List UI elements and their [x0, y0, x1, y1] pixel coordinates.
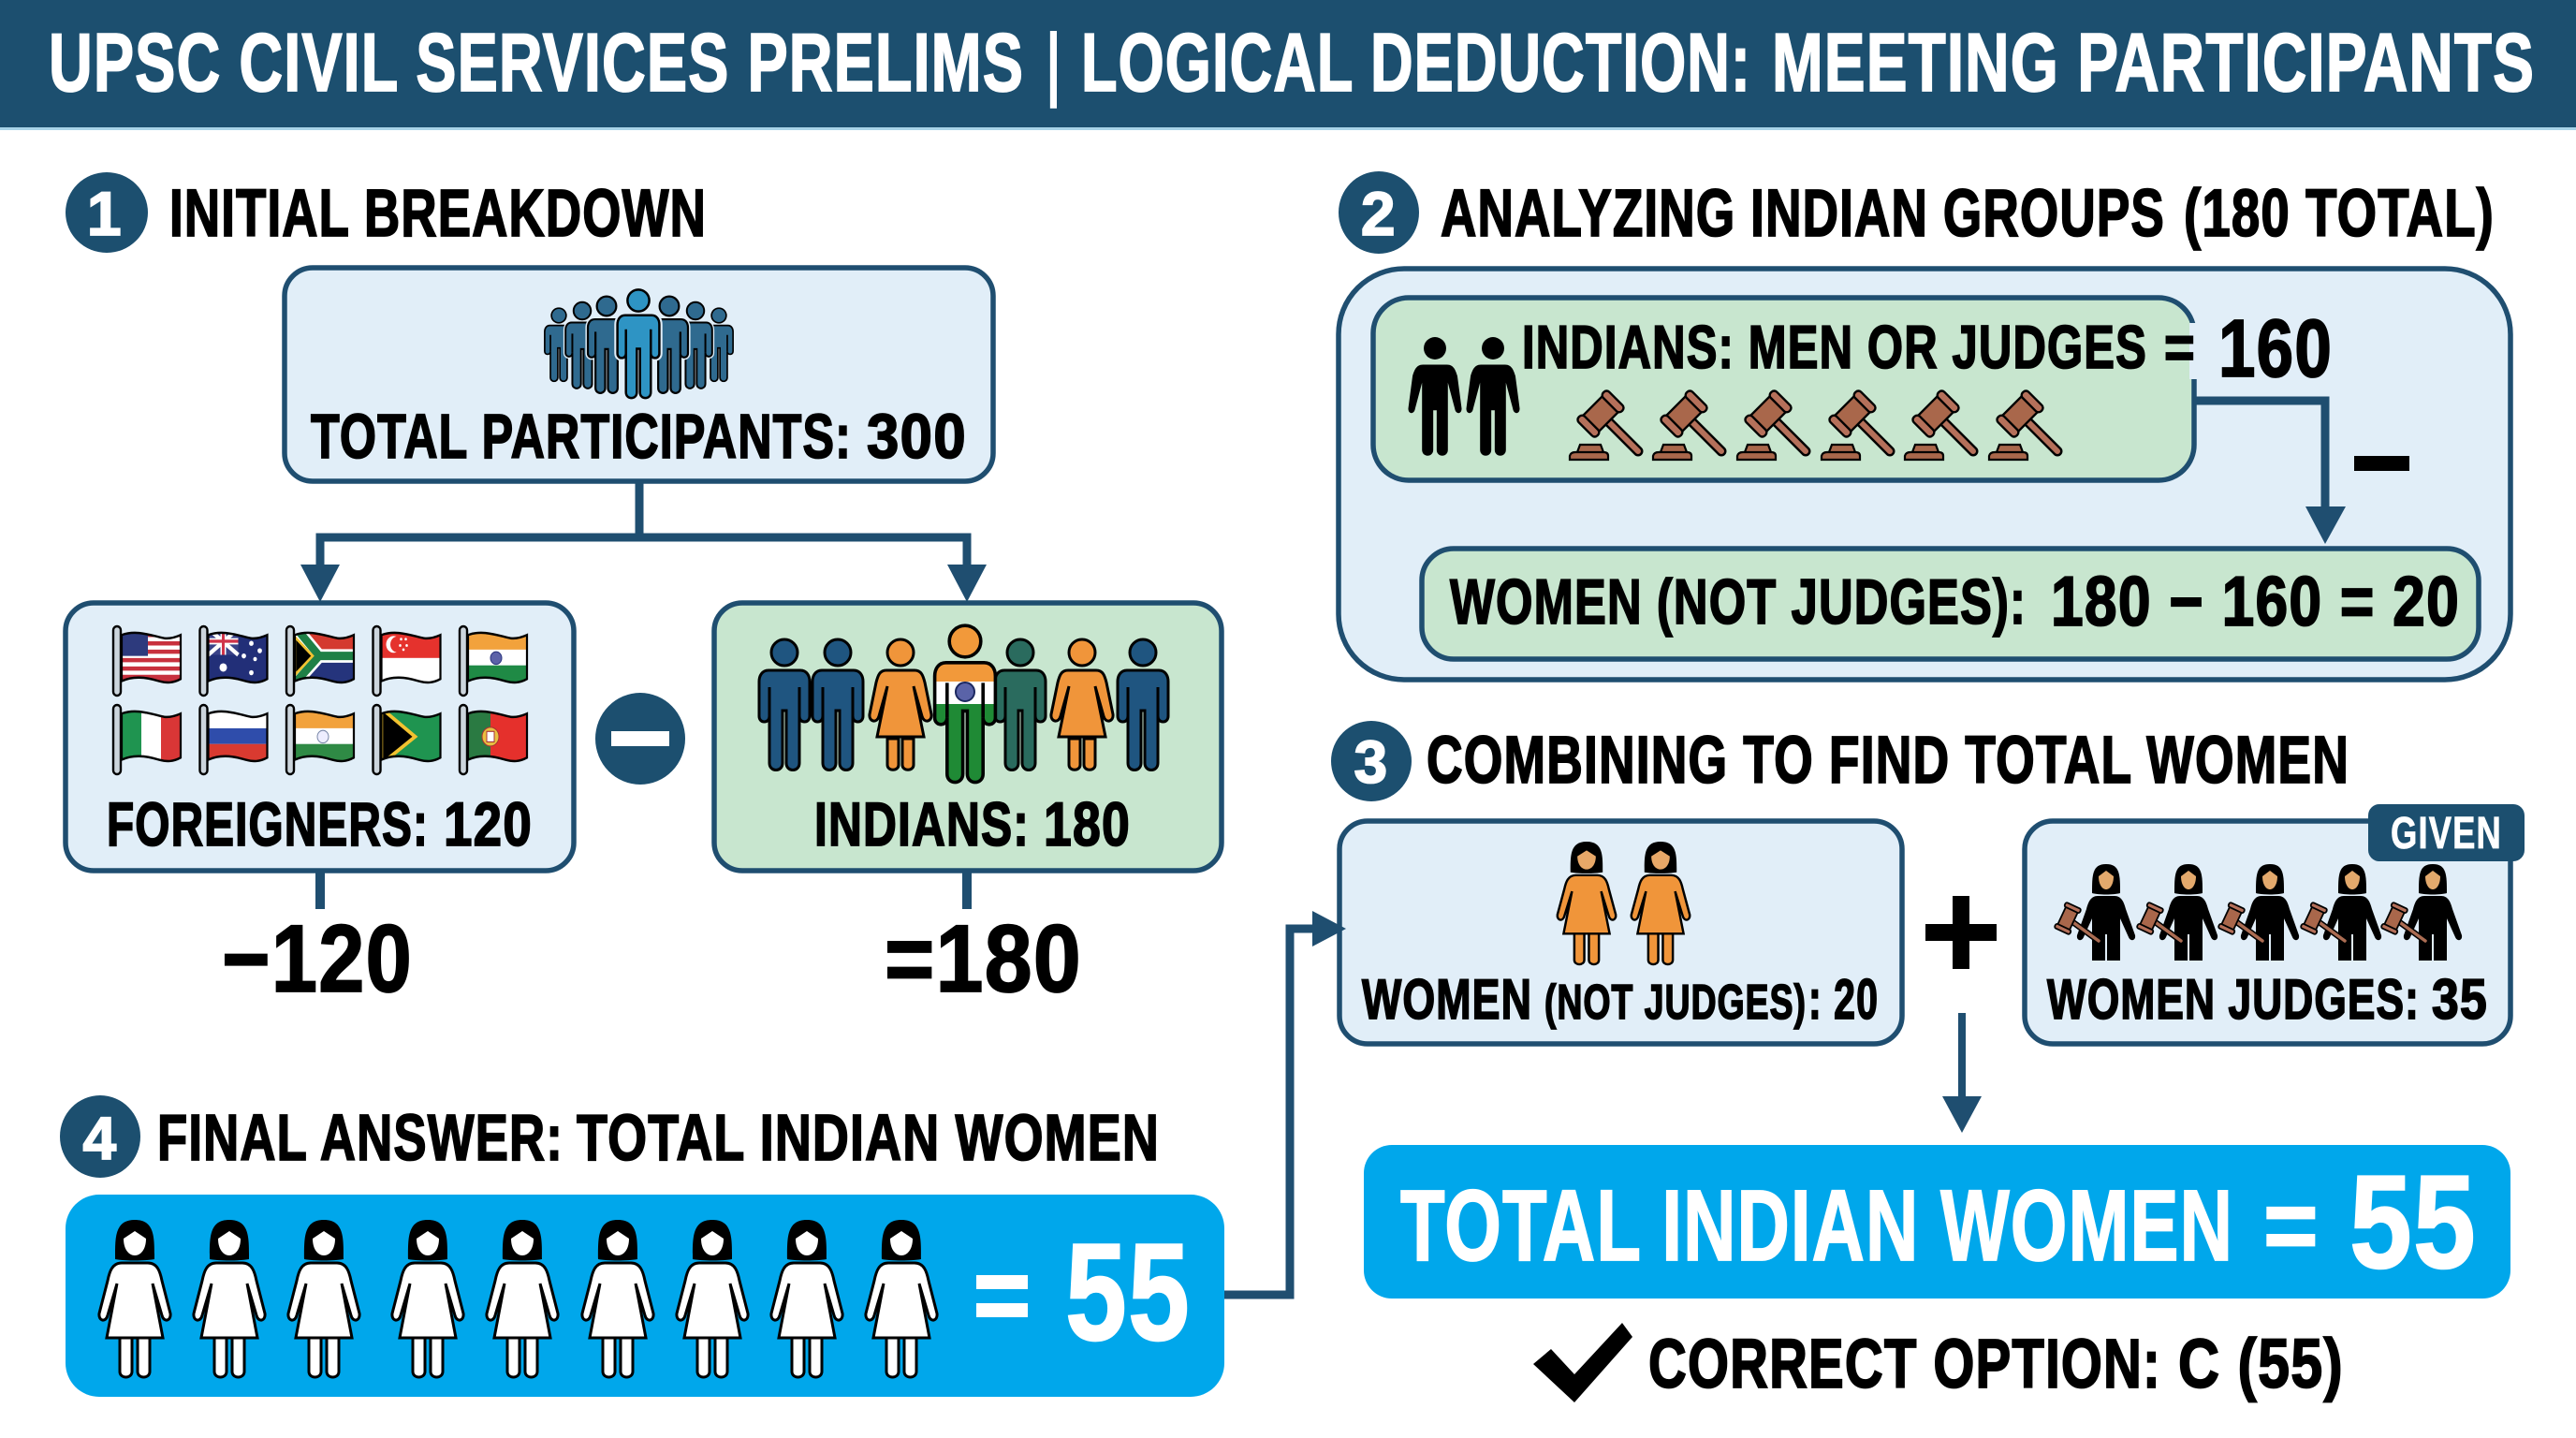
icon: group of indian people — [759, 625, 1168, 783]
panel: total indian women: TOTAL INDIAN WOMEN — [1400, 1168, 2233, 1282]
panel: total indian women: = — [2263, 1168, 2320, 1282]
arrows: split into foreigners and indians — [300, 481, 987, 602]
panel: indians men or judges: = — [2164, 313, 2196, 381]
panel: total participants: TOTAL PARTICIPANTS: — [311, 402, 852, 472]
panel: indians: INDIANS: — [814, 789, 1030, 858]
text: correct option: C (55) — [2178, 1325, 2344, 1402]
section 1 heading: initial breakdown: INITIAL BREAKDOWN — [169, 177, 707, 251]
section 2 heading: analyzing indian groups: ANALYZING INDIAN GROUPS — [1441, 177, 2165, 251]
panel: foreigners: FOREIGNERS: — [107, 789, 429, 858]
panel: total indian women: 55 — [2349, 1148, 2477, 1297]
value: equals 180 — [885, 871, 1082, 1012]
title banner: | — [1043, 16, 1064, 109]
icon: minus circle — [595, 693, 685, 785]
badge: given — [2368, 804, 2525, 861]
panel: foreigners: 120 — [444, 789, 533, 858]
text: correct option: CORRECT OPTION: — [1648, 1325, 2161, 1402]
panel: indians men or judges — [1373, 298, 2199, 480]
badge: given: GIVEN — [2391, 809, 2502, 858]
section 1 heading: initial breakdown — [66, 172, 707, 253]
panel: women not judges 20 — [1339, 821, 1902, 1044]
panel: women judges 35 — [2025, 804, 2525, 1044]
section 4 heading: final answer — [60, 1095, 1160, 1178]
icon: two men — [1408, 337, 1520, 456]
section 2 heading: analyzing indian groups: 2 — [1361, 179, 1397, 248]
value: 160: 160 — [2218, 303, 2333, 394]
panel: women not judges 20: (NOT JUDGES) — [1544, 976, 1807, 1030]
panel: women not judges 20: WOMEN — [1362, 968, 1532, 1031]
icon: row of white women — [99, 1220, 937, 1377]
section 4 heading: final answer: 4 — [82, 1105, 118, 1172]
icon: row of gavels — [1570, 389, 2057, 460]
arrow: down to total — [1942, 1013, 1982, 1133]
section 4 heading: final answer: TOTAL INDIAN WOMEN — [577, 1101, 1160, 1174]
panel: indian groups analysis — [1339, 269, 2510, 680]
icon: crowd of people — [545, 289, 733, 398]
panel: women not judges calculation — [1422, 549, 2479, 659]
value: equals 180: =180 — [885, 905, 1082, 1012]
panel: women not judges calculation: 180 − 160 = 20 — [2051, 562, 2460, 640]
panel: women judges 35: WOMEN JUDGES: — [2047, 968, 2420, 1031]
section 4 heading: final answer: FINAL ANSWER: — [157, 1101, 564, 1174]
title banner: UPSC CIVIL SERVICES PRELIMS — [49, 16, 1024, 109]
arrow: connector from final answer to women not judges — [1224, 911, 1346, 1295]
panel: foreigners — [66, 603, 574, 871]
section 3 heading: combining: 3 — [1354, 728, 1389, 796]
panel: women not judges calculation: WOMEN (NOT JUDGES): — [1450, 566, 2027, 638]
panel: total participants — [285, 268, 993, 481]
panel: indians — [714, 603, 1222, 871]
value: minus 120: −120 — [222, 905, 413, 1012]
panel: women judges 35: 35 — [2432, 968, 2488, 1031]
value: minus 120 — [222, 871, 413, 1012]
title banner: LOGICAL DEDUCTION: — [1081, 16, 1751, 109]
icon: check mark — [1533, 1323, 1632, 1402]
panel: total indian women — [1364, 1145, 2510, 1299]
panel: final answer 55 women — [66, 1195, 1224, 1397]
panel: indians: 180 — [1044, 789, 1131, 858]
panel: indians men or judges: INDIANS: MEN OR JUDGES — [1522, 313, 2147, 381]
section 1 heading: initial breakdown: 1 — [87, 179, 123, 248]
icon: women judges with gavels — [2055, 864, 2462, 961]
icon: flags of foreign countries — [113, 626, 528, 774]
panel: total participants: 300 — [867, 402, 967, 472]
icon: two women — [1558, 842, 1690, 964]
arrow: subtract to women not judges — [2194, 401, 2409, 544]
icon: plus sign — [1925, 896, 1997, 969]
panel: final answer 55 women: 55 — [1065, 1215, 1191, 1370]
section 3 heading: combining — [1331, 721, 2349, 801]
panel: women not judges 20: : 20 — [1808, 968, 1879, 1031]
title banner — [0, 0, 2576, 130]
